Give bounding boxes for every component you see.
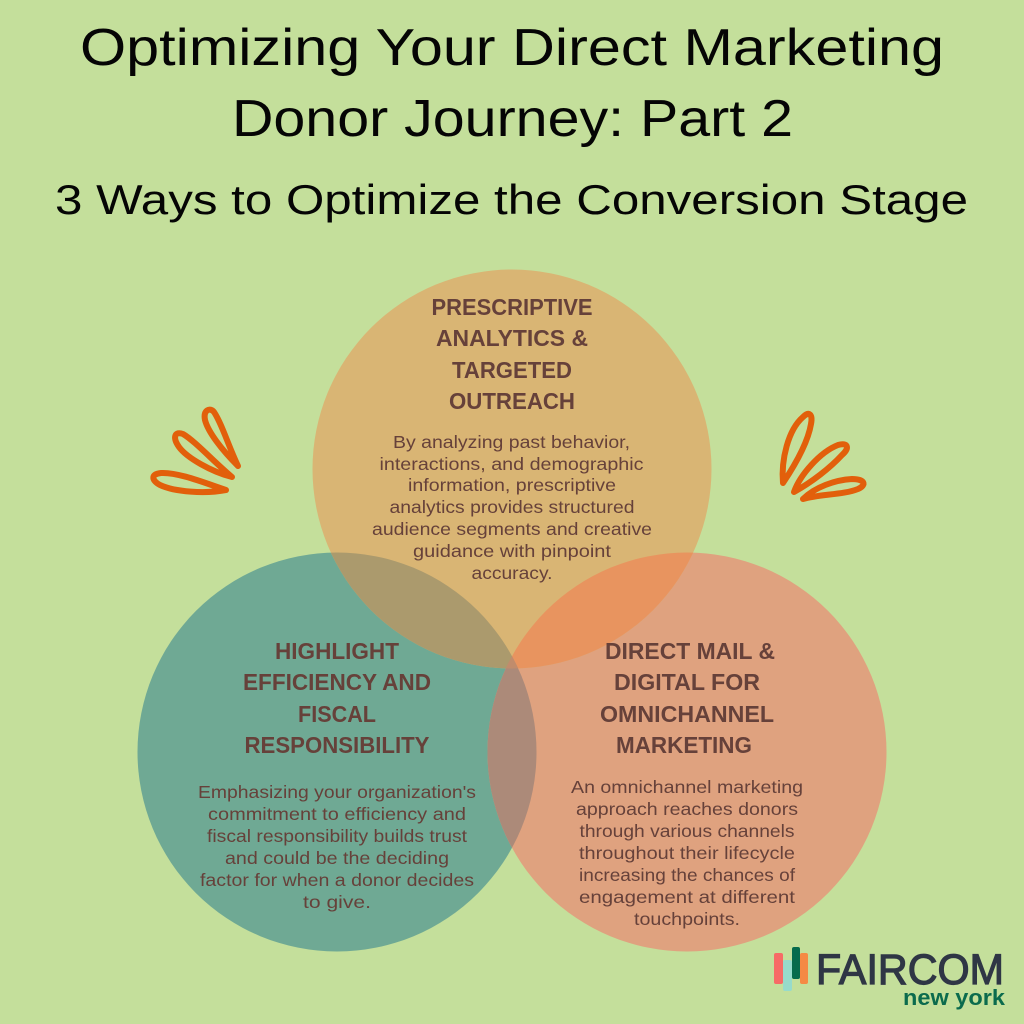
title xyxy=(80,19,944,148)
panel: direct mail and digital xyxy=(571,638,803,929)
text: direct mail body: touchpoints. xyxy=(634,909,740,929)
heading: prescriptive analytics: ANALYTICS & xyxy=(436,325,588,351)
text: direct mail body: throughout their lifecycle xyxy=(579,843,795,863)
text: efficiency body: and could be the deciding xyxy=(225,848,449,868)
panel: prescriptive analytics xyxy=(372,294,652,583)
text: efficiency body: commitment to efficiency and xyxy=(208,804,466,824)
heading: direct mail: OMNICHANNEL xyxy=(600,701,774,727)
text: direct mail body: An omnichannel marketing xyxy=(571,777,803,797)
text: efficiency body: Emphasizing your organization's xyxy=(198,782,476,802)
heading: efficiency: RESPONSIBILITY xyxy=(244,732,430,758)
text: efficiency body: to give. xyxy=(303,892,371,912)
heading: direct mail xyxy=(600,638,775,758)
text: efficiency body: factor for when a donor decides xyxy=(200,870,474,890)
heading: efficiency: EFFICIENCY AND xyxy=(243,669,431,695)
text: efficiency body: fiscal responsibility builds trust xyxy=(207,826,467,846)
text: direct mail body: approach reaches donors xyxy=(576,799,798,819)
text: prescriptive analytics body: information, prescriptive xyxy=(408,475,616,495)
icon: left leaf sprig xyxy=(153,410,238,492)
text: direct mail body: engagement at different xyxy=(579,887,795,907)
heading: efficiency: FISCAL xyxy=(298,701,376,727)
logo: Faircom New York xyxy=(774,946,1006,1010)
subtitle: 3 Ways to Optimize the Conversion Stage xyxy=(55,176,968,223)
heading: efficiency: HIGHLIGHT xyxy=(275,638,399,664)
heading: prescriptive analytics: OUTREACH xyxy=(449,388,575,414)
icon: right leaf sprig xyxy=(783,414,864,499)
title: Optimizing Your Direct Marketing xyxy=(80,19,944,77)
text: prescriptive analytics body xyxy=(372,432,652,583)
text: prescriptive analytics body: audience segments and creative xyxy=(372,519,652,539)
text: direct mail body xyxy=(571,777,803,929)
text: direct mail body: increasing the chances of xyxy=(579,865,795,885)
logo wordmark: FAIRCOM xyxy=(816,946,1004,994)
venn diagram circles xyxy=(138,270,886,952)
heading: prescriptive analytics xyxy=(432,294,592,414)
title: Donor Journey: Part 2 xyxy=(232,90,793,148)
text: prescriptive analytics body: By analyzing past behavior, xyxy=(393,432,630,452)
heading: prescriptive analytics: PRESCRIPTIVE xyxy=(432,294,592,320)
text: prescriptive analytics body: guidance with pinpoint xyxy=(413,541,611,561)
heading: prescriptive analytics: TARGETED xyxy=(452,357,572,383)
text: direct mail body: through various channels xyxy=(580,821,795,841)
text: prescriptive analytics body: analytics provides structured xyxy=(390,497,634,517)
heading: efficiency xyxy=(243,638,431,758)
text: prescriptive analytics body: interactions, and demographic xyxy=(380,454,644,474)
logo mark xyxy=(774,947,808,991)
panel: efficiency and fiscal responsibility xyxy=(198,638,476,912)
logo subtext: new york xyxy=(903,985,1006,1010)
heading: direct mail: DIGITAL FOR xyxy=(614,669,760,695)
text: prescriptive analytics body: accuracy. xyxy=(472,563,552,583)
text: efficiency body xyxy=(198,782,476,912)
heading: direct mail: DIRECT MAIL & xyxy=(605,638,775,664)
heading: direct mail: MARKETING xyxy=(616,732,752,758)
